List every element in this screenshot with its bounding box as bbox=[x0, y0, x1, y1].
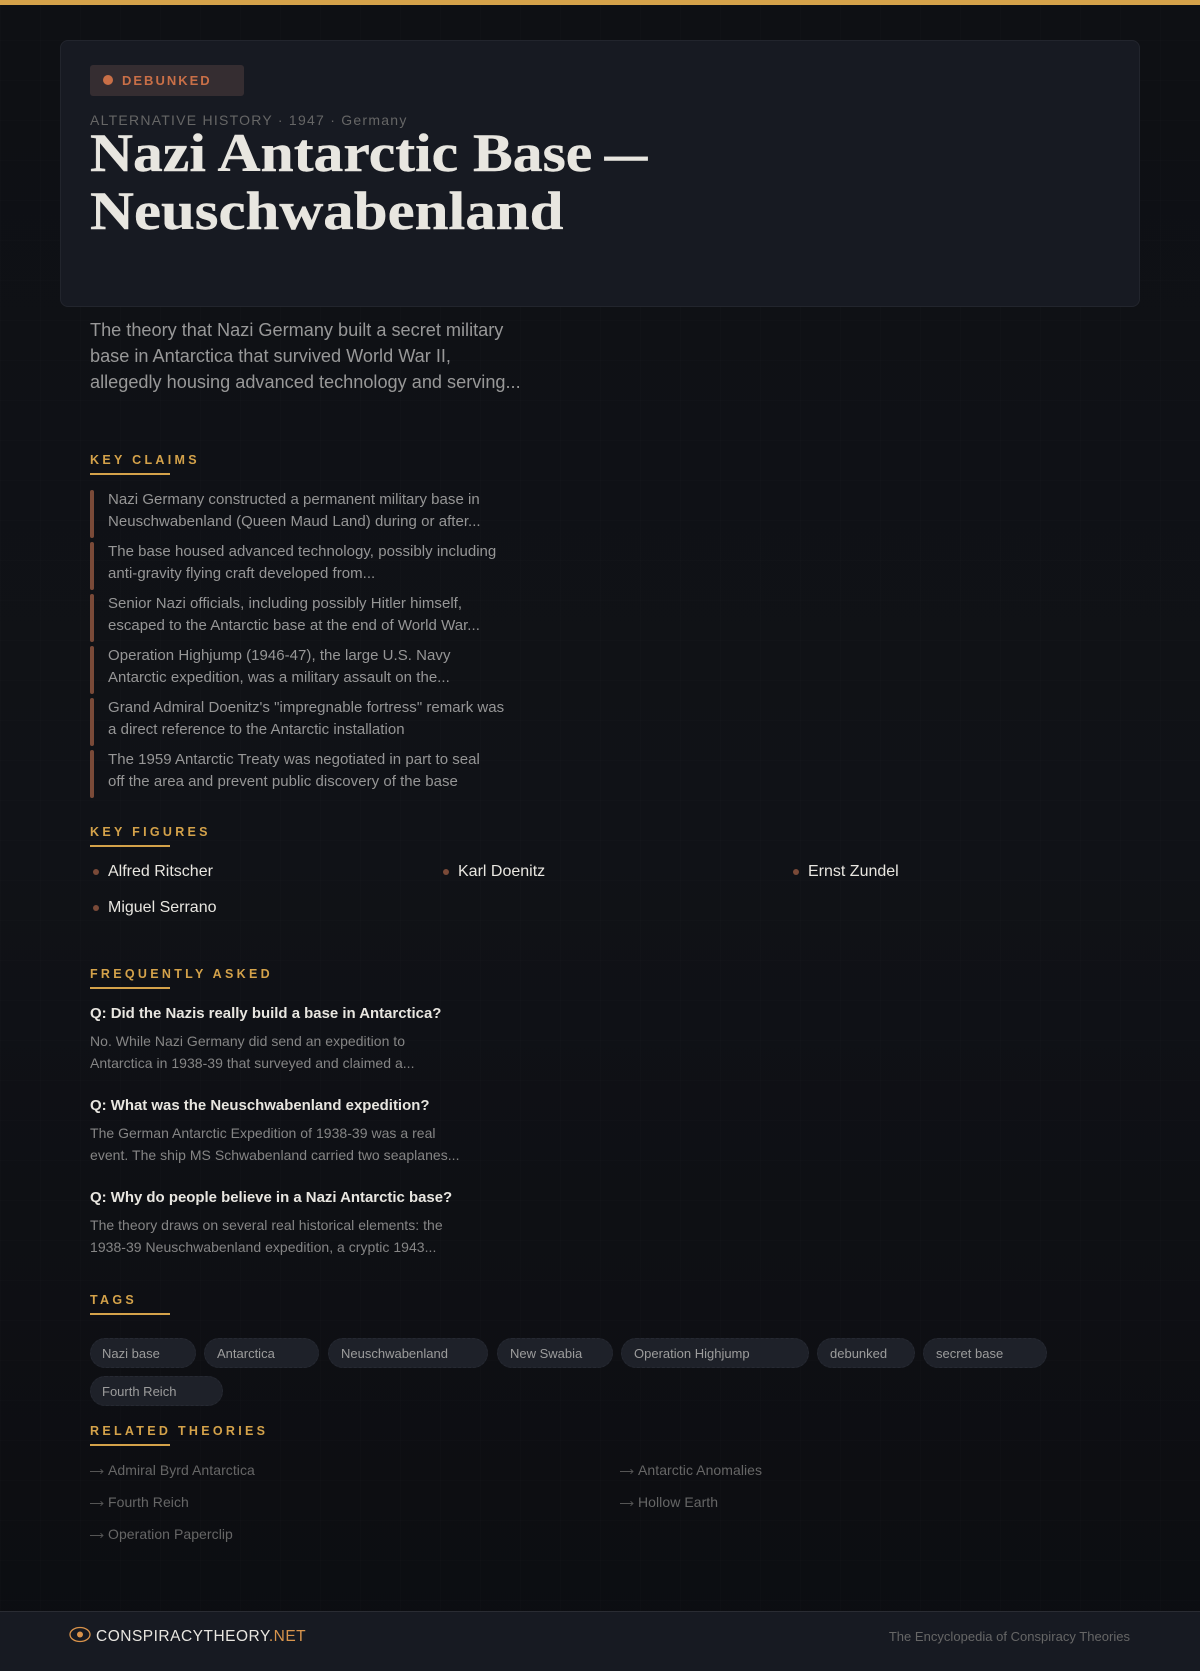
related link: Admiral Byrd Antarctica bbox=[108, 1462, 255, 1478]
faq item 1 bbox=[90, 1005, 441, 1071]
section: key claims bbox=[90, 453, 504, 798]
claim 2: anti-gravity flying craft developed from... bbox=[108, 565, 375, 582]
tag bbox=[923, 1338, 1047, 1368]
tag: New Swabia bbox=[510, 1346, 582, 1361]
claim 1: Neuschwabenland (Queen Maud Land) during or after... bbox=[108, 513, 481, 530]
claim 3: Senior Nazi officials, including possibly Hitler himself, bbox=[108, 595, 462, 612]
title: Neuschwabenland bbox=[90, 181, 563, 241]
claim 5: Grand Admiral Doenitz's "impregnable fortress" remark was bbox=[108, 699, 504, 716]
section: key figures bbox=[90, 825, 899, 916]
faq item 1: Q: Did the Nazis really build a base in Antarctica? bbox=[90, 1005, 441, 1022]
tag: Fourth Reich bbox=[102, 1384, 176, 1399]
top accent bar bbox=[0, 0, 1200, 5]
section: frequently asked bbox=[90, 967, 460, 1255]
claim 5 bbox=[90, 698, 504, 746]
claim 4 bbox=[90, 646, 450, 694]
section: tags bbox=[90, 1293, 1047, 1406]
claim 3: escaped to the Antarctic base at the end of World War... bbox=[108, 617, 480, 634]
heading: key figures: KEY FIGURES bbox=[90, 825, 211, 839]
category meta line: ALTERNATIVE HISTORY · 1947 · Germany bbox=[90, 112, 408, 128]
badge label: DEBUNKED bbox=[122, 73, 212, 88]
tag bbox=[90, 1376, 223, 1406]
faq item 3: Q: Why do people believe in a Nazi Antarctic base? bbox=[90, 1189, 452, 1206]
intro paragraph: base in Antarctica that survived World War II, bbox=[90, 346, 451, 366]
logo wordmark: CONSPIRACYTHEORY.NET bbox=[96, 1628, 306, 1645]
intro paragraph: The theory that Nazi Germany built a secret military bbox=[90, 320, 503, 340]
status badge: debunked bbox=[90, 65, 244, 96]
claim 4: Operation Highjump (1946-47), the large U.S. Navy bbox=[108, 647, 450, 664]
title bbox=[90, 123, 648, 241]
faq item 2 bbox=[90, 1097, 460, 1163]
related link: Operation Paperclip bbox=[108, 1526, 233, 1542]
footer bbox=[0, 1611, 1200, 1671]
tag bbox=[817, 1338, 915, 1368]
heading: tags: TAGS bbox=[90, 1293, 137, 1307]
heading: frequently asked: FREQUENTLY ASKED bbox=[90, 967, 273, 981]
claim 6 bbox=[90, 750, 480, 798]
faq item 2: event. The ship MS Schwabenland carried two seaplanes... bbox=[90, 1147, 460, 1163]
tag: debunked bbox=[830, 1346, 887, 1361]
figure: Alfred Ritscher: Alfred Ritscher bbox=[108, 863, 213, 880]
claim 2 bbox=[90, 542, 496, 590]
claim 1: Nazi Germany constructed a permanent military base in bbox=[108, 491, 480, 508]
faq item 1: Antarctica in 1938-39 that surveyed and claimed a... bbox=[90, 1055, 415, 1071]
tag bbox=[497, 1338, 613, 1368]
icon: status dot bbox=[103, 75, 113, 85]
icon: eye logo bbox=[69, 1626, 91, 1642]
claim 1 bbox=[90, 490, 481, 538]
heading: related theories: RELATED THEORIES bbox=[90, 1424, 268, 1438]
claim 6: off the area and prevent public discovery of the base bbox=[108, 773, 458, 790]
faq item 2: Q: What was the Neuschwabenland expedition? bbox=[90, 1097, 429, 1114]
tag bbox=[204, 1338, 319, 1368]
panel: hero header bbox=[60, 40, 1140, 307]
claim 2: The base housed advanced technology, possibly including bbox=[108, 543, 496, 560]
tag bbox=[90, 1338, 196, 1368]
faq item 3: The theory draws on several real historical elements: the bbox=[90, 1217, 443, 1233]
claim 5: a direct reference to the Antarctic installation bbox=[108, 721, 405, 738]
tag bbox=[621, 1338, 809, 1368]
related link: Fourth Reich bbox=[108, 1494, 189, 1510]
related link: Antarctic Anomalies bbox=[638, 1462, 762, 1478]
tag: secret base bbox=[936, 1346, 1003, 1361]
faq item 2: The German Antarctic Expedition of 1938-39 was a real bbox=[90, 1125, 436, 1141]
title: Nazi Antarctic Base bbox=[90, 123, 592, 183]
section: related theories bbox=[90, 1424, 762, 1542]
intro paragraph bbox=[90, 320, 521, 392]
intro paragraph: allegedly housing advanced technology and serving... bbox=[90, 372, 521, 392]
faq item 1: No. While Nazi Germany did send an expedition to bbox=[90, 1033, 405, 1049]
tag bbox=[328, 1338, 488, 1368]
related link: Hollow Earth bbox=[638, 1494, 718, 1510]
claim 3 bbox=[90, 594, 480, 642]
faq item 3: 1938-39 Neuschwabenland expedition, a cryptic 1943... bbox=[90, 1239, 436, 1255]
figure: Ernst Zundel: Ernst Zundel bbox=[808, 863, 899, 880]
tag: Operation Highjump bbox=[634, 1346, 750, 1361]
title: — bbox=[605, 123, 648, 183]
footer tagline: The Encyclopedia of Conspiracy Theories bbox=[889, 1629, 1130, 1644]
faq item 3 bbox=[90, 1189, 452, 1255]
tag: Antarctica bbox=[217, 1346, 275, 1361]
tag: Neuschwabenland bbox=[341, 1346, 448, 1361]
claim 6: The 1959 Antarctic Treaty was negotiated in part to seal bbox=[108, 751, 480, 768]
claim 4: Antarctic expedition, was a military assault on the... bbox=[108, 669, 450, 686]
heading: key claims: KEY CLAIMS bbox=[90, 453, 200, 467]
figure: Miguel Serrano: Miguel Serrano bbox=[108, 899, 216, 916]
tag: Nazi base bbox=[102, 1346, 160, 1361]
figure: Karl Doenitz: Karl Doenitz bbox=[458, 863, 545, 880]
